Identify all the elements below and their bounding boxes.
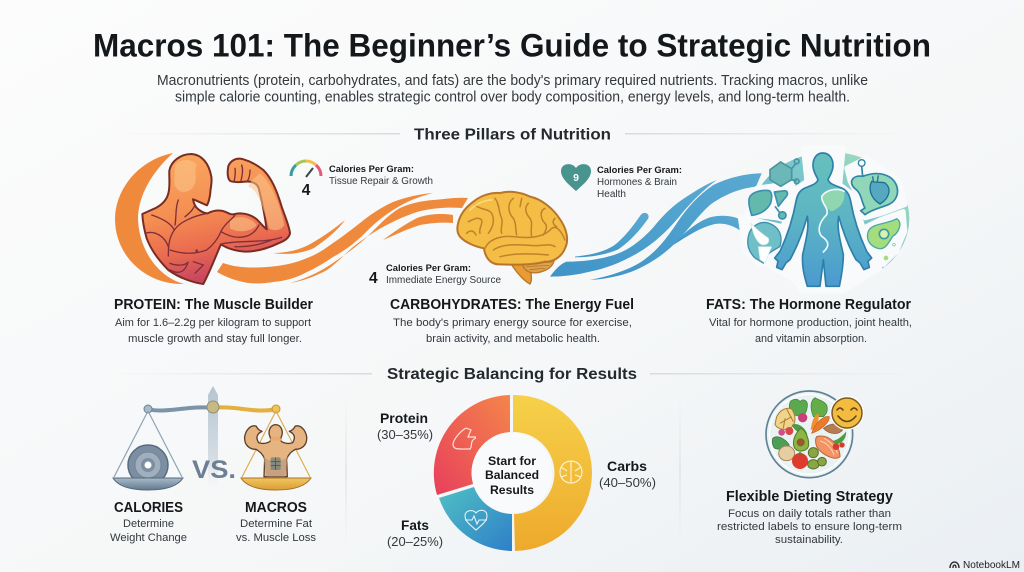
left strings xyxy=(114,411,182,477)
panel: carbohydrates description: The body's primary energy source for exercise, xyxy=(393,317,632,329)
circular organ backdrop xyxy=(751,152,909,285)
left pan xyxy=(113,478,183,490)
panel: flexible dieting: restricted labels to ensure long-term xyxy=(717,521,902,533)
right strings xyxy=(242,411,310,477)
icon: flexed arm xyxy=(453,428,476,449)
food items xyxy=(789,399,807,417)
torso highlight xyxy=(821,189,844,211)
nipple xyxy=(195,249,198,252)
icon: hormone cell xyxy=(867,219,900,260)
icon: liver xyxy=(749,190,787,219)
label: fats: (20–25%) xyxy=(387,534,443,549)
panel: fats description: FATS: The Hormone Regulator xyxy=(706,297,911,313)
icon: heart with pulse xyxy=(465,510,487,530)
icon: heart with 9 xyxy=(561,164,591,191)
slice: carbs xyxy=(513,395,592,551)
lobe highlight xyxy=(470,200,492,210)
macros label xyxy=(236,500,317,544)
icon: smiley xyxy=(830,396,864,430)
callout: fats calories per gram xyxy=(561,164,682,200)
blue flowing streams xyxy=(550,173,762,280)
donut center text: Balanced xyxy=(485,470,539,482)
label: carbs: (40–50%) xyxy=(599,475,656,490)
panel: fats description xyxy=(706,297,912,345)
cerebellum xyxy=(522,260,554,273)
vs label: VS. xyxy=(192,456,236,484)
section heading: strategic balancing: Strategic Balancing for Results xyxy=(387,366,637,383)
callout: fats calories per gram: 9 xyxy=(573,172,579,184)
panel: carbohydrates brain illustration xyxy=(457,192,567,284)
brain folds xyxy=(467,198,565,257)
icon: molecule xyxy=(770,159,799,186)
panel: flexible dieting xyxy=(717,391,902,546)
brain stem xyxy=(510,262,531,284)
slice: protein xyxy=(434,395,510,495)
panel: carbohydrates description xyxy=(390,297,634,345)
panel: flexible dieting: sustainability. xyxy=(775,534,843,546)
callout: protein calories per gram: Calories Per Gram: xyxy=(329,164,414,175)
label: protein xyxy=(377,410,433,442)
label: carbs xyxy=(599,458,656,490)
label: protein: Protein xyxy=(380,410,428,426)
panel: protein description: PROTEIN: The Muscle Builder xyxy=(114,297,313,313)
callout: protein calories per gram: Tissue Repair & Growth xyxy=(329,176,433,187)
label: protein: (30–35%) xyxy=(377,427,433,442)
donut chart xyxy=(377,395,656,551)
panel: protein illustration xyxy=(115,153,468,284)
panel: protein description xyxy=(114,297,313,345)
callout: carbohydrate calories per gram: 4 xyxy=(369,270,378,287)
white halos xyxy=(740,148,905,291)
icon: brain outline xyxy=(560,461,582,483)
watermark: NotebookLM: NotebookLM xyxy=(963,559,1020,571)
section heading: three pillars: Three Pillars of Nutrition xyxy=(414,126,611,144)
right beam xyxy=(213,407,276,411)
scale pole xyxy=(208,386,218,490)
label: carbs: Carbs xyxy=(607,458,647,474)
icon: gauge xyxy=(291,161,321,177)
calories label xyxy=(110,500,187,544)
donut center text: Start for xyxy=(488,456,537,468)
head and arm highlights xyxy=(174,160,284,231)
callout: protein calories per gram xyxy=(291,161,433,199)
intro paragraph: simple calorie counting, enables strategic control over body composition, energy levels, and long-term health. xyxy=(175,90,850,106)
callout: carbohydrate calories per gram: Calories Per Gram: xyxy=(386,263,471,274)
center disc xyxy=(472,433,552,513)
left beam xyxy=(148,407,213,411)
icon: plate of food xyxy=(766,391,853,478)
panel: flexible dieting: Flexible Dieting Strategy xyxy=(726,489,893,505)
label: fats: Fats xyxy=(401,517,429,533)
human figure xyxy=(775,153,872,286)
callout: carbohydrate calories per gram xyxy=(369,263,501,287)
panel: fats description: and vitamin absorption. xyxy=(755,333,867,345)
callout: fats calories per gram: Hormones & Brain xyxy=(597,177,677,188)
muscular torso and flexed arm xyxy=(142,154,290,284)
orange swoosh arc xyxy=(115,153,184,284)
panel: calories vs macros scale xyxy=(110,386,317,544)
orange flowing streams xyxy=(217,193,468,284)
callout: protein calories per gram: 4 xyxy=(302,182,311,199)
brain outline xyxy=(457,192,567,265)
callout: fats calories per gram: Calories Per Gram: xyxy=(597,165,682,176)
icon: flexing man xyxy=(245,425,307,477)
macros label: Determine Fat xyxy=(240,518,312,530)
panel: fats description: Vital for hormone production, joint health, xyxy=(709,317,912,329)
callout: carbohydrate calories per gram: Immediate Energy Source xyxy=(386,275,501,286)
slice: fats xyxy=(439,487,512,551)
icon: heart organ xyxy=(852,160,898,215)
intro paragraph: Macronutrients (protein, carbohydrates, and fats) are the body's primary required nutrients. Tracking macros, unlike xyxy=(157,73,868,89)
donut center text xyxy=(485,456,539,497)
callout: fats calories per gram: Health xyxy=(597,189,626,200)
panel: flexible dieting: Focus on daily totals rather than xyxy=(728,508,891,520)
calories label: Weight Change xyxy=(110,532,187,544)
donut center text: Results xyxy=(490,485,534,497)
calories label: CALORIES xyxy=(114,500,183,516)
panel: carbohydrates description: CARBOHYDRATES: The Energy Fuel xyxy=(390,297,634,313)
title: Macros 101: The Beginner’s Guide to Strategic Nutrition xyxy=(93,28,931,64)
intro paragraph xyxy=(157,73,868,106)
label: fats xyxy=(387,517,443,549)
right pan xyxy=(241,478,311,490)
panel: protein description: muscle growth and stay full longer. xyxy=(128,333,302,345)
macros label: MACROS xyxy=(245,500,307,516)
panel: carbohydrates description: brain activity, and metabolic health. xyxy=(426,333,600,345)
icon: weight plate xyxy=(128,445,168,485)
calories label: Determine xyxy=(123,518,174,530)
macros label: vs. Muscle Loss xyxy=(236,532,317,544)
icon: knee joint xyxy=(748,222,781,263)
panel: fats illustration xyxy=(550,148,909,291)
muscle definition lines xyxy=(145,165,282,273)
panel: protein description: Aim for 1.6–2.2g per kilogram to support xyxy=(115,317,311,329)
